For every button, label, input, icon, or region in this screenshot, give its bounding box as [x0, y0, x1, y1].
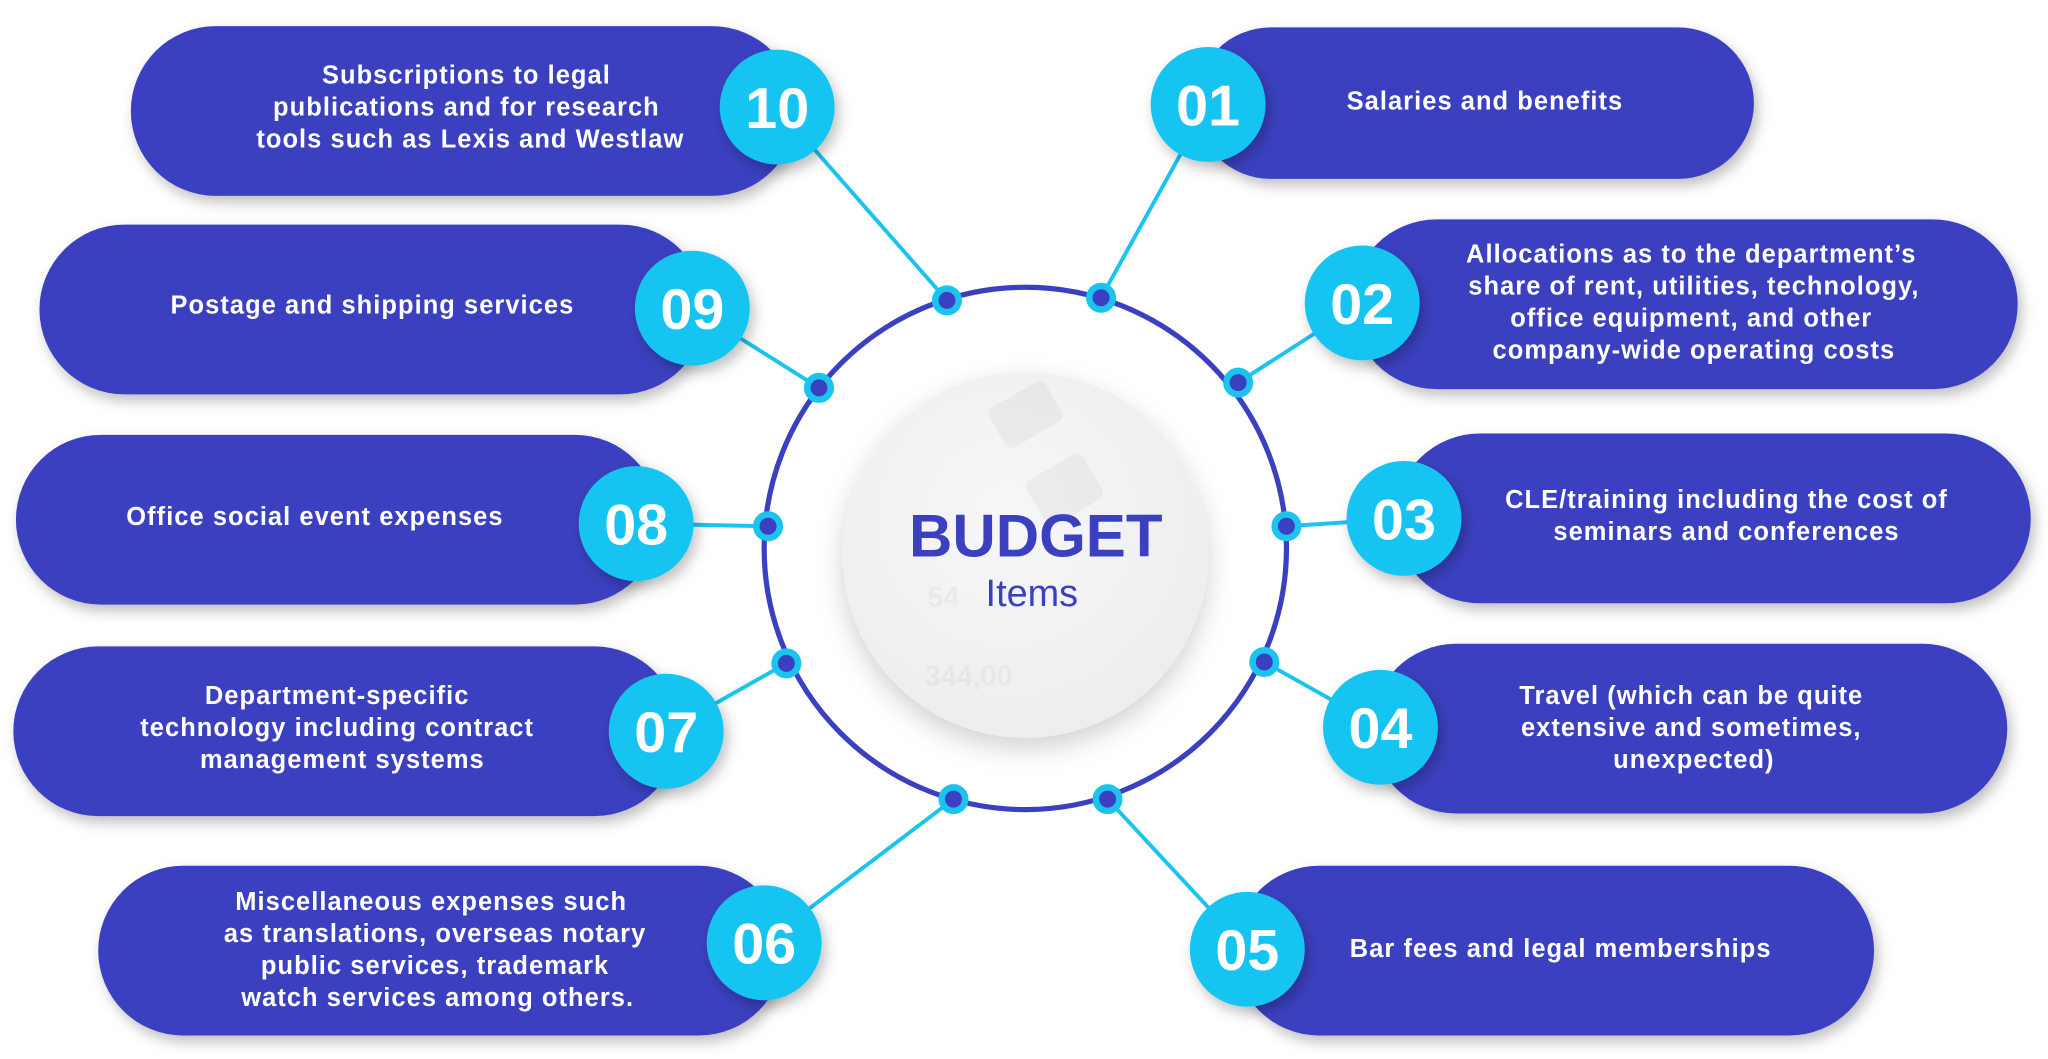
number badges: 09 — [660, 278, 724, 342]
number badges: 08 — [604, 494, 668, 558]
text: 04: unexpected) — [1613, 746, 1775, 774]
text: 07: technology including contract — [140, 714, 534, 742]
pill: 10 — [131, 26, 797, 196]
number badges — [579, 47, 1461, 1007]
text: 06: public services, trademark — [261, 952, 609, 980]
pill: 03 — [1395, 434, 2031, 603]
text: 01: Salaries and benefits — [1347, 88, 1623, 116]
text: 03: CLE/training including the cost of — [1505, 486, 1948, 514]
text: 06: as translations, overseas notary — [224, 920, 646, 948]
center image circle: 344,00 — [925, 661, 1013, 693]
text: 10: publications and for research — [273, 94, 660, 122]
text: 07: Department-specific — [205, 682, 469, 710]
pill texts — [126, 62, 1948, 1012]
text: 02: Allocations as to the department’s — [1466, 240, 1916, 268]
title: BUDGET Items: BUDGET — [909, 502, 1163, 569]
pill: 04 — [1371, 644, 2007, 814]
pill: 09 — [39, 225, 705, 394]
text: 03: seminars and conferences — [1553, 518, 1900, 546]
number badges: 04 — [1349, 697, 1412, 761]
number badges: 10 — [745, 77, 809, 141]
title: BUDGET Items — [909, 502, 1163, 615]
center image circle — [842, 372, 1208, 738]
pill: 06 — [98, 866, 784, 1035]
number badges: 03 — [1372, 488, 1436, 552]
number badges: 02 — [1330, 273, 1394, 337]
text: 02: company-wide operating costs — [1493, 336, 1895, 364]
text: 06: watch services among others. — [240, 984, 634, 1012]
number badges: 05 — [1215, 919, 1279, 983]
pill: 01 — [1195, 27, 1754, 179]
pill: 07 — [13, 646, 679, 816]
center image circle: 54 — [927, 582, 959, 614]
ring dots — [756, 286, 1298, 811]
text: 04: extensive and sometimes, — [1521, 714, 1862, 742]
pill: 08 — [16, 435, 660, 605]
text: 04: Travel (which can be quite — [1519, 682, 1863, 710]
text: 02: office equipment, and other — [1510, 304, 1872, 332]
title: BUDGET Items: Items — [986, 573, 1078, 615]
connector lines — [636, 104, 1404, 949]
text: 06: Miscellaneous expenses such — [235, 888, 627, 916]
text: 10: Subscriptions to legal — [322, 62, 611, 90]
number badges: 01 — [1176, 74, 1240, 138]
pill: 05 — [1234, 866, 1874, 1035]
text: 08: Office social event expenses — [126, 503, 504, 531]
number badges: 06 — [732, 913, 796, 977]
pill: 02 — [1352, 219, 2018, 389]
text: 10: tools such as Lexis and Westlaw — [256, 126, 684, 154]
text: 09: Postage and shipping services — [171, 291, 574, 319]
text: 05: Bar fees and legal memberships — [1350, 935, 1772, 963]
text: 07: management systems — [200, 746, 485, 774]
ring — [764, 287, 1286, 810]
text: 02: share of rent, utilities, technology, — [1468, 272, 1919, 300]
number badges: 07 — [634, 701, 698, 765]
